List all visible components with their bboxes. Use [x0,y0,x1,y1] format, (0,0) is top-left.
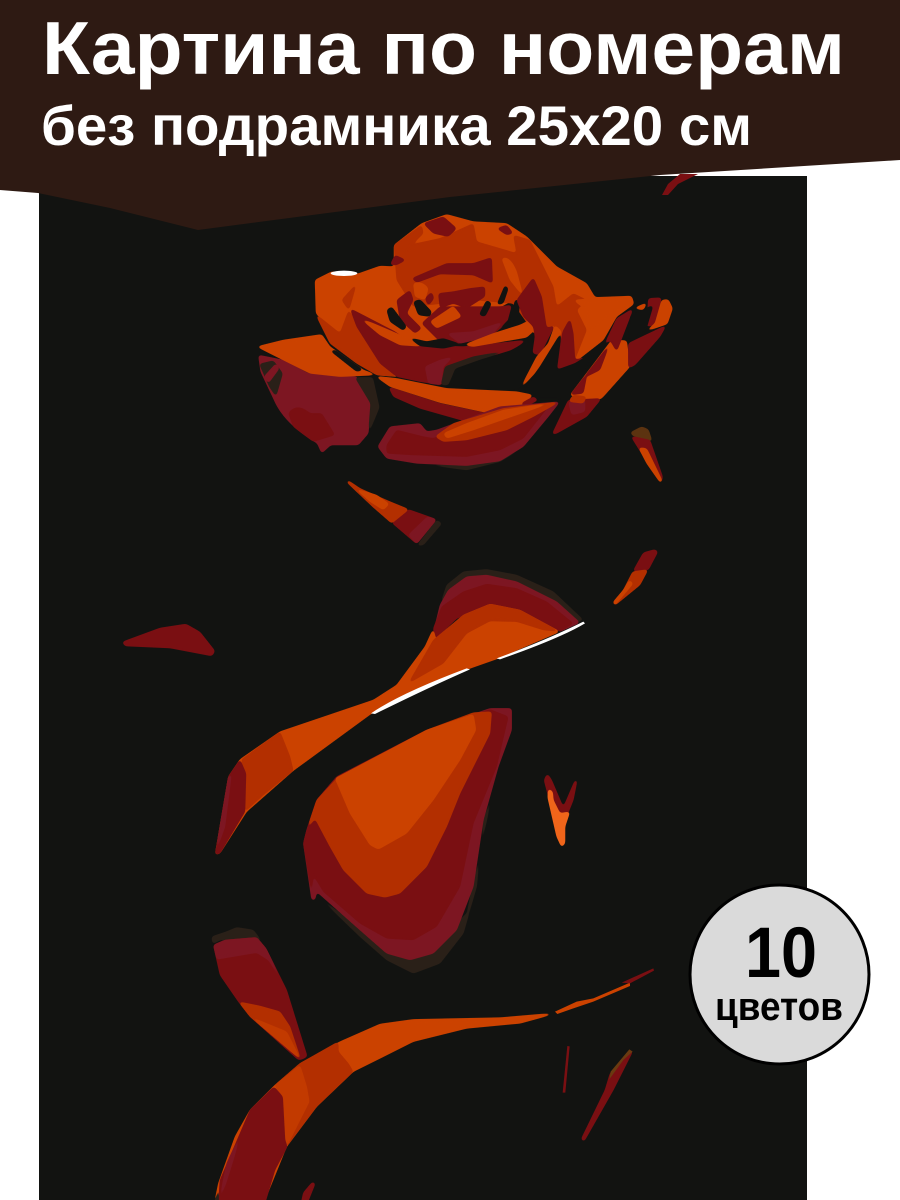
illustration: large petals [215,569,585,973]
large heart petal [303,708,513,973]
petal right [613,549,658,605]
black gaps [448,338,538,392]
sweeping upper petal [215,569,585,855]
white highlight [331,271,357,276]
subtitle: без подрамника 25х20 см [41,94,752,157]
orange highlights [502,258,523,297]
title: Картина по номерам [42,6,845,90]
illustration: rose bloom [257,214,673,470]
illustration: top corner petal [662,174,698,195]
main bloom orange silhouette [315,214,634,377]
red and orange small petal [544,773,577,847]
bottom sliver [301,1182,315,1200]
right dark folds [517,277,555,355]
long slash petal [581,1049,633,1142]
illustration: left floating petal [122,624,215,656]
thin slash [563,1046,570,1093]
header banner [0,0,900,230]
lower-left wine petal [258,355,379,453]
central fold dark band [350,308,527,385]
brown shadow [441,350,511,385]
petal upper right [630,427,663,483]
lower front petal [378,395,602,470]
mid orange shading [394,223,587,367]
badge label: цветов [715,985,843,1029]
badge number: 10 [745,914,817,993]
orange outer petal left [257,334,377,377]
white highlight line [371,622,585,714]
lower left petal [212,927,307,1060]
petal left [346,480,442,546]
illustration: stem and lower petals [212,927,654,1200]
panel: black painting background [39,176,807,1200]
badge: 10 colours [690,885,869,1064]
illustration: small petals upper [346,427,663,605]
main stem [214,968,654,1200]
lower middle petal [375,376,538,422]
inner dark folds [412,257,493,283]
